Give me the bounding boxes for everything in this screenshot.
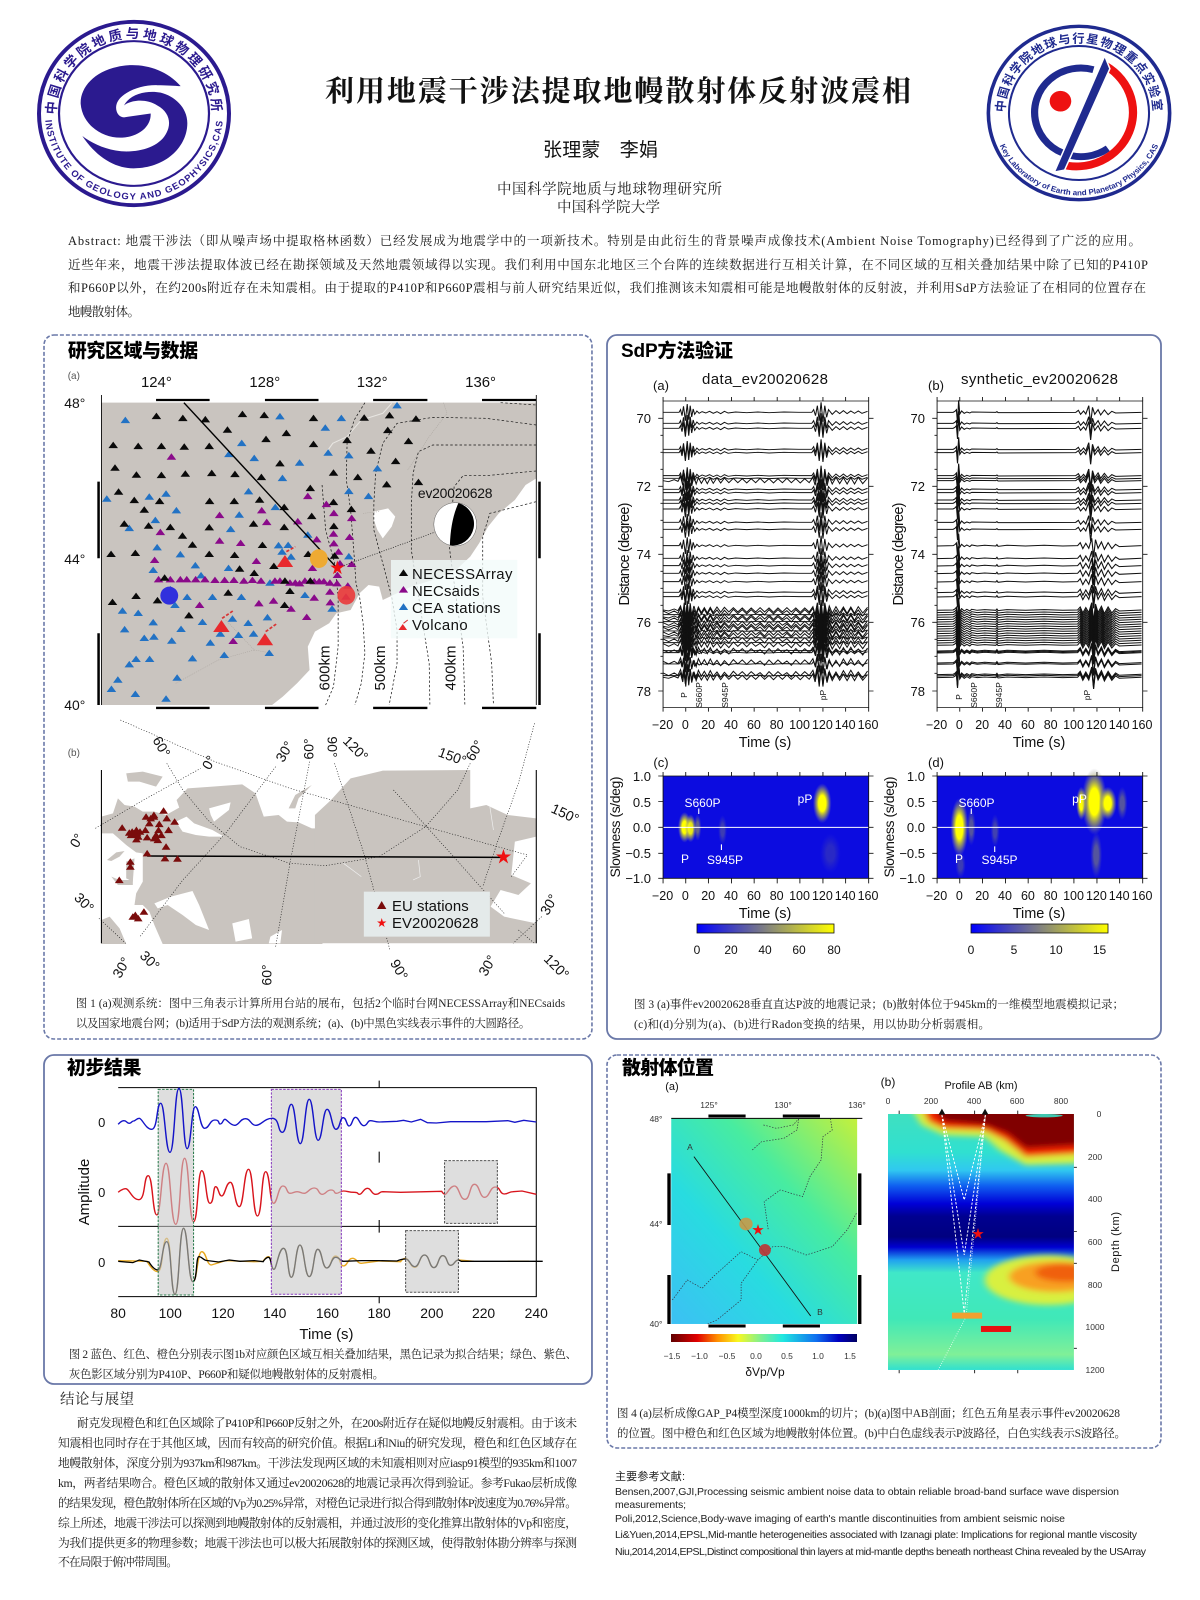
chart: depth cross-section: 200 (924, 1096, 938, 1106)
panel: conclusions and outlook (58, 1390, 577, 1569)
logo: Institute of Geology and Geophysics (37, 20, 231, 208)
map: Eurasia event and EU stations: 90° (324, 736, 340, 758)
chart: radon transform of data: 160 (858, 889, 878, 903)
chart: radon transform of data: −20 (652, 889, 673, 903)
map: Eurasia event and EU stations: 0° (199, 753, 219, 772)
colorbar: synthetic: 10 (1049, 943, 1063, 957)
chart: data seismograms: 160 (858, 718, 878, 732)
chart: depth cross-section: 400 (967, 1096, 981, 1106)
chart: synthetic seismograms: 72 (911, 479, 925, 494)
chart: stacked waveforms: 160 (316, 1305, 339, 1321)
chart: radon transform of synthetic: 80 (1044, 889, 1058, 903)
chart: data seismograms (617, 371, 878, 751)
shaded window: P660P (271, 1089, 341, 1294)
chart: data seismograms: 140 (835, 718, 856, 732)
waveform: black fit (118, 1228, 543, 1294)
chart: depth cross-section: Profile AB (km) (944, 1080, 1018, 1092)
chart: radon transform of synthetic: 160 (1132, 889, 1152, 903)
chart: depth cross-section: 800 (1088, 1280, 1102, 1290)
chart: synthetic seismograms: pP (1082, 689, 1092, 700)
text block: conclusions body: 的结果发现，橙色散射体所在区域的Vp为0.25%异常，对橙色记录进行拟合得到散射体P波速度为0.76%异常。 (58, 1496, 577, 1510)
land: eastern Eurasia (315, 770, 536, 943)
chart: radon transform of synthetic: pP (1072, 792, 1087, 806)
icon: event star (972, 1228, 984, 1239)
chart: data seismograms: (a) (653, 378, 669, 393)
chart: stacked waveforms: 100 (159, 1305, 182, 1321)
affiliations: 中国科学院大学 (557, 199, 660, 216)
chart: stacked waveforms: 140 (263, 1305, 287, 1321)
chart: radon transform of data: 120 (812, 889, 833, 903)
chart: radon transform of data: −0.5 (625, 846, 651, 861)
chart: depth cross-section: 800 (1054, 1096, 1068, 1106)
chart: data seismograms: 20 (701, 718, 715, 732)
map: Eurasia event and EU stations: 30° (71, 889, 97, 916)
caption: figure 3 (634, 997, 1124, 1031)
chart: synthetic seismograms: 160 (1132, 718, 1152, 732)
map: Eurasia event and EU stations: 60° (462, 737, 486, 764)
map: tomography slice: B (817, 1307, 823, 1317)
map: tomography slice: 44° (650, 1219, 662, 1229)
chart: synthetic seismograms: S945P (994, 682, 1004, 708)
references: Poli,2012,Science,Body-wave imaging of earth's mantle discontinuities from ambient seismic noise (615, 1513, 1065, 1525)
references: 主要参考文献: (615, 1469, 685, 1483)
chart: synthetic seismograms: 20 (975, 718, 989, 732)
chart: synthetic seismograms: 70 (911, 411, 925, 426)
swirl: lower crescent (82, 92, 187, 168)
shaded window: scatterer red (445, 1161, 497, 1223)
chart: radon transform of data: 60 (747, 889, 761, 903)
chart: data seismograms: 76 (637, 615, 651, 630)
chart: radon transform of synthetic: P (955, 852, 963, 866)
path: great-circle line (184, 403, 336, 567)
icon: event star (752, 1224, 764, 1235)
chart: radon transform of synthetic: 60 (1021, 889, 1035, 903)
chart: radon transform of synthetic: (d) (928, 755, 944, 770)
chart: radon transform of synthetic: 100 (1063, 889, 1084, 903)
chart: data seismograms: P (679, 692, 689, 698)
chart: radon transform of data: Slowness (s/deg) (607, 776, 623, 878)
chart: radon transform of data: pP (798, 792, 812, 806)
colorbar: data: 20 (724, 943, 738, 957)
chart: depth cross-section: 600 (1088, 1237, 1102, 1247)
chart: radon transform of synthetic: 140 (1109, 889, 1130, 903)
chart: stacked waveforms (76, 1081, 548, 1343)
chart: synthetic seismograms (891, 371, 1152, 751)
chart: depth cross-section: Depth (km) (1110, 1212, 1122, 1272)
map: northeast China stations: 400km (443, 646, 460, 690)
orange scatterer bar (952, 1313, 982, 1319)
chart: stacked waveforms: 240 (525, 1305, 548, 1321)
chart: stacked waveforms: 0 (98, 1255, 105, 1270)
icon: red region circle (759, 1244, 771, 1256)
references (615, 1469, 1147, 1558)
logo: Key Laboratory of Earth and Planetary Physics (986, 24, 1172, 202)
colorbar: data: 80 (827, 943, 841, 957)
caption: figure 3: (c)和(d)分别为(a)、(b)进行Radon变换的结果，用以协助分析弱震相。 (634, 1017, 990, 1031)
map: Eurasia event and EU stations: 60° (301, 738, 316, 760)
path: great-circle line (147, 856, 503, 857)
map: tomography slice: 130° (774, 1100, 792, 1110)
chart: radon transform of data: S660P (684, 796, 721, 810)
chart: depth cross-section: 600 (1010, 1096, 1024, 1106)
map: Eurasia event and EU stations: 0° (66, 831, 87, 850)
title: 利用地震干涉法提取地幔散射体反射波震相 (325, 74, 911, 108)
chart: radon transform of synthetic: 20 (975, 889, 989, 903)
map: northeast China stations: 124° (141, 374, 172, 391)
logo: Key Laboratory of Earth and Planetary Physics: 中国科学院地球与行星物理重点实验室 (994, 32, 1164, 112)
chart: data seismograms: S945P (720, 682, 730, 708)
icon: event star (330, 560, 344, 574)
red scatterer bar (981, 1326, 1011, 1332)
map: Eurasia event and EU stations: 30° (272, 738, 296, 765)
text block: conclusions body: 综上所述，地震干涉法可以探测到地幔散射体的反射震相，并通过波形的变化推算出散射体的Vp和密度， (58, 1516, 577, 1530)
waveform: red stack (118, 1158, 536, 1224)
map: northeast China stations: 132° (357, 374, 388, 391)
text block: conclusions body: 地幔散射体，深度分别为937km和987km。干涉法发现两区域的未知震相则对应iasp91模型的935km和1007 (58, 1456, 577, 1470)
chart: radon transform of data: 0 (682, 889, 689, 903)
colorbar: data: 0 (694, 943, 701, 957)
map: northeast China stations: 40° (64, 697, 85, 713)
stations: NECESSArray (black) (107, 411, 422, 618)
colorbar: dVp/Vp: −0.5 (719, 1351, 736, 1361)
chart: synthetic seismograms: 0 (956, 718, 963, 732)
chart: radon transform of synthetic: S660P (958, 796, 995, 810)
chart: data seismograms: data_ev20020628 (702, 371, 828, 388)
colorbar: dVp/Vp: 0.0 (750, 1351, 762, 1361)
chart: synthetic seismograms: (b) (928, 378, 944, 393)
chart: radon transform of data: 0.5 (633, 795, 651, 810)
references: Niu,2014,2014,EPSL,Distinct compositional thin layers at mid-mantle depths beneath northeast China revealed by the USArray (615, 1546, 1147, 1558)
chart: stacked waveforms: 200 (420, 1305, 444, 1321)
legend box (391, 560, 517, 638)
map: tomography slice: (a) (665, 1081, 679, 1093)
panel: study area and data (44, 335, 592, 1039)
caption: figure 4: 的位置。图中橙色和红色区域为地幔散射体位置。(b)中白色虚线表示P波路径，白色实线表示S波路径。 (617, 1426, 1126, 1440)
chart: data seismograms: Distance (degree) (617, 502, 633, 606)
text block: conclusions body: km，两者结果吻合。橙色区域的散射体又通过ev20020628的地震记录再次得到验证。参考Fukao层析成像 (58, 1476, 577, 1490)
chart: data seismograms: 70 (637, 411, 651, 426)
chart: synthetic seismograms: Distance (degree) (891, 502, 907, 606)
text block: conclusions body: 为我们提供更多的物理参数；地震干涉法也可以极大拓展散射体的探测区域，使得散射体勘分辨率与探测 (58, 1536, 577, 1550)
caption: figure 2: 灰色影区域分别为P410P、P660P和疑似地幔散射体的反射震相。 (69, 1367, 384, 1381)
chart: radon transform of data: Time (s) (739, 906, 791, 922)
caption: figure 2 (69, 1347, 577, 1381)
chart: radon transform of data: −1.0 (625, 871, 651, 886)
text block: conclusions body: 不在局限于俯冲带周围。 (58, 1555, 178, 1569)
colorbar: dVp/Vp (664, 1334, 857, 1379)
icons: volcanoes (213, 547, 295, 645)
waveform: orange stack (118, 1228, 529, 1294)
chart: data seismograms: 74 (637, 547, 651, 562)
caption: figure 2: 图 2 蓝色、红色、橙色分别表示图1b对应颜色区域互相关叠加结果，黑色记录为拟合结果；绿色、紫色、 (69, 1347, 577, 1361)
chart: radon transform of synthetic: −1.0 (899, 871, 925, 886)
caption: figure 1: 以及国家地震台网；(b)适用于SdP方法的观测系统；(a)、(b)中黑色实线表示事件的大圆路径。 (76, 1016, 530, 1030)
panel: SdP method verification (607, 335, 1161, 1039)
chart: radon transform of synthetic: 1.0 (907, 769, 925, 784)
chart: synthetic seismograms: 80 (1044, 718, 1058, 732)
chart: data seismograms: 120 (812, 718, 833, 732)
chart: radon transform of data: 1.0 (633, 769, 651, 784)
map: tomography slice: A (687, 1142, 693, 1152)
heading: study area: 研究区域与数据 (68, 339, 198, 362)
colorbar: synthetic: 0 (968, 943, 975, 957)
shaded window: scatterer orange (406, 1231, 458, 1292)
map: Eurasia event and EU stations: EV20020628 (392, 915, 479, 932)
chart: data seismograms: 60 (747, 718, 761, 732)
abstract: Abstract: 地震干涉法（即从噪声场中提取格林函数）已经发展成为地震学中的一项新技术。特别是由此衍生的背景噪声成像技术(Ambient Noise Tomography)已经得到了广泛的应用。 (68, 233, 1141, 248)
colorbar: dVp/Vp: δVp/Vp (745, 1365, 785, 1379)
map: tomography slice: 48° (650, 1114, 662, 1124)
map: Eurasia event and EU stations: 30° (475, 952, 499, 979)
chart: depth cross-section: 1200 (1086, 1365, 1105, 1375)
map: northeast China stations: 500km (372, 646, 389, 690)
chart: depth cross-section (881, 1075, 1122, 1375)
colorbar: data (694, 924, 841, 957)
chart: radon transform of synthetic: −20 (926, 889, 947, 903)
chart: synthetic seismograms: 74 (911, 547, 925, 562)
colorbar: dVp/Vp: 1.0 (812, 1351, 824, 1361)
map: tomography slice: 125° (700, 1100, 718, 1110)
map: northeast China stations: NECsaids (412, 583, 480, 600)
icon: blue region circle (160, 587, 178, 605)
chart: stacked waveforms: 0 (98, 1185, 105, 1200)
affiliations (497, 180, 722, 216)
chart: data seismograms: 100 (789, 718, 810, 732)
chart: data seismograms: 0 (682, 718, 689, 732)
chart: depth cross-section: 200 (1088, 1152, 1102, 1162)
heading: SdP verification: SdP方法验证 (621, 339, 733, 362)
chart: radon transform of synthetic: Slowness (s/deg) (881, 776, 897, 878)
icon: focal mechanism beachball (434, 503, 477, 546)
chart: data seismograms: −20 (652, 718, 673, 732)
chart: radon transform of data: 40 (724, 889, 738, 903)
chart: radon transform of data: (c) (653, 755, 669, 770)
map: northeast China stations: NECESSArray (412, 566, 513, 583)
map: Eurasia event and EU stations: 150° (549, 800, 582, 827)
logo: Institute of Geology and Geophysics: 中国科学院地质与地球物理研究所 (44, 27, 224, 114)
chart: radon transform of data: 20 (701, 889, 715, 903)
map: tomography slice: 40° (650, 1319, 662, 1329)
chart: depth cross-section: 0 (886, 1096, 891, 1106)
chart: synthetic seismograms: 76 (911, 615, 925, 630)
chart: radon transform of synthetic: −0.5 (899, 846, 925, 861)
chart: data seismograms: 78 (637, 684, 651, 699)
map: Eurasia event and EU stations: 30° (137, 947, 163, 974)
chart: radon transform of synthetic: Time (s) (1013, 906, 1065, 922)
colorbar: data: 60 (792, 943, 806, 957)
map: tomography slice: 136° (848, 1100, 866, 1110)
map: northeast China stations: CEA stations (412, 600, 500, 617)
icon: red region circle (337, 586, 355, 605)
chart: radon transform of synthetic: 0 (956, 889, 963, 903)
waveform: blue stack (118, 1088, 536, 1152)
map: Eurasia event and EU stations: 120° (541, 951, 573, 982)
colorbar: dVp/Vp: 0.5 (781, 1351, 793, 1361)
map: northeast China stations (64, 371, 539, 713)
chart: radon transform of synthetic (881, 755, 1152, 922)
map: Eurasia event and EU stations: 120° (340, 733, 372, 764)
chart: radon transform of data: P (681, 852, 689, 866)
map: Eurasia event and EU stations: 30° (537, 891, 561, 918)
chart: stacked waveforms: 180 (368, 1305, 391, 1321)
stations: NECsaids (purple) (151, 454, 356, 644)
chart: data seismograms: pP (818, 689, 828, 700)
map: Eurasia event and EU stations: (b) (68, 748, 80, 759)
chart: stacked waveforms: 80 (110, 1305, 126, 1321)
chart: synthetic seismograms: 120 (1086, 718, 1107, 732)
map: northeast China stations: 600km (316, 646, 333, 690)
chart: radon transform of data: 140 (835, 889, 856, 903)
abstract: 近些年来，地震干涉法提取体波已经在勘探领域及天然地震领域得以实现。我们利用中国东北地区三个台阵的连续数据进行互相关计算，在不同区域的互相关叠加结果中除了已知的P410P (68, 257, 1148, 272)
chart: radon transform of data: 0.0 (633, 820, 651, 835)
land: western Eurasia (101, 772, 322, 944)
legend box (364, 892, 490, 937)
map: Eurasia event and EU stations: 90° (387, 956, 412, 983)
chart: data seismograms: S660P (694, 682, 704, 708)
chart: synthetic seismograms: Time (s) (1013, 735, 1065, 751)
heading: conclusions: 结论与展望 (60, 1390, 134, 1408)
chart: synthetic seismograms: P (954, 694, 964, 700)
heading: scatterer location: 散射体位置 (622, 1056, 714, 1079)
caption: figure 1 (76, 996, 566, 1030)
chart: radon transform of synthetic: 0.5 (907, 795, 925, 810)
colorbar: data: 40 (758, 943, 772, 957)
path: profile AB (694, 1157, 811, 1316)
chart: synthetic seismograms: synthetic_ev20020628 (961, 371, 1118, 388)
map: Eurasia event and EU stations: 30° (109, 954, 133, 981)
chart: synthetic seismograms: S660P (969, 682, 979, 708)
shaded window: P410P (158, 1089, 194, 1295)
caption: figure 4: 图 4 (a)层析成像GAP_P4模型深度1000km的切片；(b)(a)图中AB剖面；红色五角星表示事件ev20020628 (617, 1406, 1120, 1420)
chart: stacked waveforms: 220 (472, 1305, 495, 1321)
map: northeast China stations: 128° (249, 374, 280, 391)
map: northeast China stations: Volcano (412, 617, 468, 634)
references: Bensen,2007,GJI,Processing seismic ambient noise data to obtain reliable broad-band surface wave dispersion (615, 1486, 1119, 1498)
map: Eurasia event and EU stations (66, 720, 582, 986)
chart: synthetic seismograms: 78 (911, 684, 925, 699)
icon: event star (496, 849, 511, 863)
chart: depth cross-section: 1000 (1086, 1322, 1105, 1332)
logo: Key Laboratory of Earth and Planetary Physics: Key Laboratory of Earth and Planetary Physics, CAS (1000, 144, 1158, 196)
map: northeast China stations: 44° (64, 551, 85, 567)
map: Eurasia event and EU stations: 60° (150, 733, 174, 760)
chart: stacked waveforms: Amplitude (76, 1159, 93, 1225)
map: northeast China stations: (a) (68, 371, 80, 382)
swirl: upper crescent (81, 65, 181, 138)
text block: conclusions body: 知震相也同时存在于其他区域，因而有较高的研究价值。根据Li和Niu的研究发现，橙色和红色区域存在 (58, 1436, 577, 1450)
colorbar: synthetic: 5 (1011, 943, 1018, 957)
authors: 张理蒙 李娟 (543, 139, 658, 161)
chart: radon transform of data (607, 755, 878, 922)
panel: scatterer location (607, 1055, 1161, 1448)
colorbar: dVp/Vp: −1.5 (664, 1351, 681, 1361)
abstract: 和P660P以外，在约200s附近存在未知震相。由于提取的P410P和P660P震相与前人研究结果近似，我们推测该未知震相可能是地幔散射体的反射波，并利用SdP方法验证了在相同的位置存在 (68, 280, 1146, 295)
map: Eurasia event and EU stations: 150° (436, 744, 469, 769)
chart: stacked waveforms: 0 (98, 1115, 105, 1130)
map: northeast China stations: 136° (465, 374, 496, 391)
colorbar: dVp/Vp: 1.5 (844, 1351, 856, 1361)
chart: depth cross-section: 400 (1088, 1194, 1102, 1204)
stations: CEA (blue) (103, 403, 401, 701)
chart: depth cross-section: 0 (1097, 1109, 1102, 1119)
chart: data seismograms: 80 (770, 718, 784, 732)
chart: stacked waveforms: Time (s) (299, 1326, 353, 1343)
abstract (68, 233, 1148, 319)
colorbar: synthetic: 15 (1093, 943, 1106, 957)
chart: synthetic seismograms: 60 (1021, 718, 1035, 732)
icon: orange region circle (310, 549, 328, 568)
chart: synthetic seismograms: 40 (998, 718, 1012, 732)
chart: data seismograms: 72 (637, 479, 651, 494)
map: Eurasia event and EU stations: EU stations (392, 898, 469, 915)
map: northeast China stations: ev20020628 (418, 485, 493, 501)
caption: figure 1: 图 1 (a)观测系统：图中三角表示计算所用台站的展布，包括2个临时台网NECESSArray和NECsaids (76, 996, 566, 1010)
chart: synthetic seismograms: 140 (1109, 718, 1130, 732)
chart: radon transform of synthetic: S945P (981, 853, 1018, 867)
chart: radon transform of synthetic: 40 (998, 889, 1012, 903)
path: focal mechanism link (337, 532, 436, 568)
colorbar: synthetic (968, 924, 1108, 957)
chart: radon transform of data: 100 (789, 889, 810, 903)
chart: synthetic seismograms: 100 (1063, 718, 1084, 732)
colorbar: dVp/Vp: −1.0 (691, 1351, 708, 1361)
logo: Institute of Geology and Geophysics: INSTITUTE OF GEOLOGY AND GEOPHYSICS,CAS (45, 120, 222, 200)
references: Li&Yuen,2014,EPSL,Mid-mantle heterogeneities associated with Izanagi plate: Implications for regional mantle viscosity (615, 1529, 1138, 1541)
chart: radon transform of data: S945P (707, 853, 743, 867)
map: tomography slice (650, 1081, 866, 1379)
stations: EU (dark red) (116, 808, 181, 921)
chart: synthetic seismograms: −20 (926, 718, 947, 732)
map: Eurasia event and EU stations: 60° (259, 964, 275, 986)
chart: data seismograms: 40 (724, 718, 738, 732)
chart: data seismograms: Time (s) (739, 735, 791, 751)
panel: preliminary results (44, 1055, 592, 1384)
chart: radon transform of synthetic: 120 (1086, 889, 1107, 903)
chart: stacked waveforms: 120 (211, 1305, 235, 1321)
icon: orange region circle (739, 1218, 753, 1230)
abstract: 地幔散射体。 (68, 304, 140, 319)
caption: figure 3: 图 3 (a)事件ev20020628垂直直达P波的地震记录；(b)散射体位于945km的一维模型地震模拟记录； (634, 997, 1124, 1011)
chart: radon transform of data: 80 (770, 889, 784, 903)
chart: radon transform of synthetic: 0.0 (907, 820, 925, 835)
caption: figure 4 (617, 1406, 1126, 1440)
references: measurements; (615, 1499, 686, 1511)
chart: depth cross-section: (b) (881, 1075, 895, 1089)
map: northeast China stations: 48° (64, 395, 85, 411)
heading: preliminary results: 初步结果 (67, 1056, 142, 1079)
text block: conclusions body: 耐克发现橙色和红色区域除了P410P和P660P反射之外，在200s附近存在疑似地幔反射震相。由于该未 (77, 1416, 577, 1430)
affiliations: 中国科学院地质与地球物理研究所 (497, 180, 722, 198)
text block: conclusions body (58, 1416, 577, 1569)
